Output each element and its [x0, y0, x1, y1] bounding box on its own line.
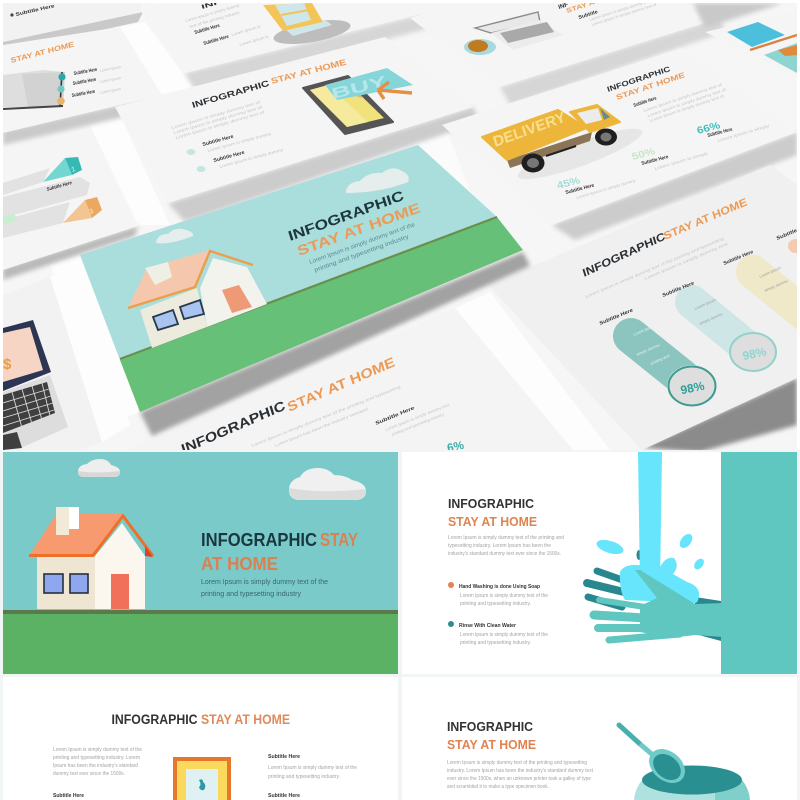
- front hand: [594, 570, 723, 640]
- water stream: [638, 452, 662, 585]
- stat: 66%: 66%: [696, 120, 722, 137]
- step bar 1: [3, 168, 50, 195]
- right text block: Subtitle Here: [268, 754, 300, 760]
- subtitle text: printing and typesetting industry: [314, 234, 410, 274]
- pill 2: 98%: [741, 344, 768, 363]
- slide: buy: [115, 37, 480, 222]
- foam: [620, 558, 699, 603]
- right text block: [268, 754, 357, 799]
- text lines: Lorem Ipsum is simply dummy text of: [175, 109, 266, 140]
- heading: STAY AT HOME: [448, 515, 537, 529]
- pill 2: simply dummy: [699, 312, 723, 326]
- back hand: [587, 550, 721, 641]
- slide: steps: [3, 157, 139, 282]
- ground: [120, 217, 523, 412]
- heading: INF: [558, 2, 569, 11]
- pill 4 fragment: [776, 228, 800, 253]
- text lines: [171, 99, 266, 140]
- text block: industry's standard dummy text ever since the 1500s.: [448, 551, 561, 557]
- step 3 accent: [3, 214, 18, 225]
- slide: top right with monitor: [693, 3, 797, 78]
- panel: perspective slide collage: [3, 0, 800, 457]
- icon: bowl and spoon: [619, 725, 750, 800]
- subtitle block: printing and typesetting industry: [391, 411, 444, 437]
- heading: [607, 66, 685, 100]
- slide: top laptop: [410, 0, 725, 105]
- pill 1: simply dummy: [636, 343, 660, 357]
- stat: 50%: Lorem Ipsum is simply: [654, 150, 709, 171]
- cloud: large: [289, 468, 366, 500]
- slide: percentage pills: [582, 165, 797, 450]
- heading: STAY AT HOME: [201, 712, 290, 727]
- heading: INFOGRAPHIC: [606, 64, 672, 94]
- heading: INFOGRAPHIC: [112, 712, 198, 727]
- text lines: Lorem Ipsum is simply dummy text of: [649, 93, 725, 123]
- text lines: Lorem Ipsum is simply dummy text of: [647, 87, 727, 118]
- text lines: Lorem Ipsum is simply dummy text of: [173, 104, 264, 135]
- stat: 66%: [697, 122, 769, 142]
- right text block: Subtitle Here: [268, 793, 300, 799]
- stat: 50%: 50%: [631, 146, 657, 163]
- icon: framed door: [263, 3, 350, 44]
- heading: STAY AT HOME: [295, 199, 422, 259]
- pill 1: 98%: [679, 379, 706, 397]
- left text block: printing and typesetting industry. Lorem: [53, 755, 140, 761]
- bullet: soap: printing and typesetting industry.: [460, 601, 531, 607]
- text lines: [185, 3, 269, 47]
- left text block: Ipsum has been the industry's standard: [53, 763, 138, 769]
- icon: hand washing under water: [587, 452, 797, 674]
- stat: 50%: Subtitle Here: [641, 154, 669, 167]
- text lines: Lorem Ipsum is simply dummy text: [644, 241, 729, 281]
- heading: INFOGRAPHIC: [191, 78, 270, 110]
- left text block: dummy text ever since the 1500s.: [53, 771, 125, 777]
- heading: [191, 57, 348, 110]
- pill 2: [662, 280, 776, 371]
- left text block: Lorem Ipsum is simply dummy text of the: [53, 747, 142, 753]
- pill 1: Subtitle Here: [599, 307, 634, 327]
- step bar 2: [3, 177, 90, 218]
- icon: phone with buy banner: BUY: [330, 73, 388, 103]
- panel: frame slide: [3, 677, 398, 800]
- heading: [558, 3, 595, 12]
- pill 1: Lorem Ipsum: [633, 324, 655, 337]
- text block: ever since the 1500s, when an unknown printer took a galley of type: [447, 776, 591, 782]
- bullet 1: [186, 131, 272, 155]
- icon: delivery truck: [481, 104, 642, 179]
- bullet: water: Lorem Ipsum is simply dummy text of the: [460, 632, 548, 638]
- right text block: Lorem Ipsum is simply dummy text of the: [268, 765, 357, 771]
- icon: step 1 prism: [43, 157, 82, 182]
- pill 3: Lorem Ipsum: [759, 266, 781, 279]
- heading: INFOGRAPHIC: [447, 720, 533, 734]
- pill 3: Subtitle Here: [723, 249, 754, 267]
- pill 3: [723, 249, 800, 320]
- bullet: soap: Hand Washing is done Using Soap: [459, 584, 540, 590]
- heading: INFOGRAPHIC: [581, 231, 667, 280]
- icon: step 3 prism: 3: [89, 208, 94, 216]
- slide: main house hero: [80, 145, 530, 436]
- heading: STAY AT HOME: [285, 354, 397, 415]
- right text block: printing and typesetting industry.: [268, 774, 340, 780]
- stat: 66%: Lorem Ipsum is simply: [717, 123, 770, 143]
- slide: top left fragment: Subtitle Here: [15, 3, 56, 18]
- text lines: Subtitle Here: [73, 67, 98, 77]
- heading: [112, 712, 290, 727]
- text lines: Lorem Ipsum is simply dummy: [185, 3, 240, 23]
- text lines: [633, 82, 727, 123]
- text lines: Lorem Ipsum: [99, 86, 122, 95]
- heading: [448, 497, 537, 529]
- text lines: Lorem Ipsum is simply dummy text of the printing and typesetting: [585, 236, 724, 299]
- subtitle text: printing and typesetting industry: [201, 591, 301, 598]
- slide: delivery: [442, 48, 797, 240]
- subtitle text: Lorem Ipsum is simply dummy text of the: [309, 222, 417, 266]
- text lines: Lorem Ipsum is simply dummy text of the printing and typesetting: [251, 384, 401, 448]
- heading: [201, 529, 359, 574]
- panel: hand washing slide: [402, 452, 797, 674]
- heading: INFOGRAPHIC: [201, 529, 317, 550]
- heading: [581, 196, 749, 280]
- teal sleeve: [721, 452, 797, 674]
- step 2 label: Subtitle Here: [46, 180, 72, 193]
- heading: STAY A: [565, 0, 596, 15]
- text lines: Lorem Ipsum is simply dummy text of: [171, 99, 262, 130]
- stat: 66%: Subtitle Here: [707, 127, 734, 139]
- bullet 2: Subtitle Here: [213, 150, 246, 164]
- bullet: water: Rinse With Clean Water: [459, 623, 516, 629]
- text lines: Lorem Ipsum: [99, 75, 122, 84]
- sky: [3, 452, 398, 610]
- text lines: Lorem Ipsum is simply dummy text of: [591, 2, 658, 27]
- heading: INFOGRAPHIC: [179, 398, 287, 457]
- pill 1: [599, 307, 717, 407]
- heading: STAY AT HOME: [662, 196, 749, 243]
- text lines: [585, 236, 729, 299]
- text block: typesetting industry. Lorem Ipsum has been the: [448, 543, 551, 549]
- subtitle block: [375, 402, 450, 437]
- pill 1: printing and: [650, 354, 670, 366]
- icon: laptop: [3, 320, 68, 450]
- text block: Lorem Ipsum is simply dummy text of the printing and: [448, 535, 564, 541]
- bullet: water: [448, 621, 548, 646]
- bullet 2: Lorem Ipsum is simply dummy: [219, 147, 284, 169]
- stat fragment: 6%: [446, 439, 466, 455]
- text lines: [251, 384, 401, 448]
- subtitle block: Subtitle Here: [375, 405, 416, 427]
- subtitle text: [201, 579, 328, 598]
- bullet: water: printing and typesetting industry.: [460, 640, 531, 646]
- pill 3: simply dummy: [764, 279, 788, 293]
- bullet 1: Lorem Ipsum is simply dummy: [207, 131, 272, 153]
- bullet: soap: Lorem Ipsum is simply dummy text of the: [460, 593, 548, 599]
- heading: INF: [201, 0, 222, 11]
- icon: step 1 prism: 1: [71, 166, 76, 174]
- text block: [447, 760, 594, 790]
- slide: top left fragment: [3, 5, 142, 45]
- heading: STAY: [320, 529, 359, 550]
- drops: [595, 532, 706, 571]
- heading: STAY AT HOME: [447, 738, 536, 752]
- panel: house slide: [3, 452, 398, 674]
- bullet: soap: [448, 582, 548, 607]
- icon: picture frame: [173, 757, 231, 800]
- bullet 2: [196, 147, 284, 172]
- subtitle block: Lorem Ipsum is simply dummy text: [385, 402, 450, 432]
- icon: book: [3, 70, 66, 109]
- icon: delivery truck: DELIVERY: [491, 109, 568, 151]
- text lines: Lorem Ipsum is: [231, 24, 261, 37]
- text block: industry. Lorem Ipsum has been the industry's standard dummy text: [447, 768, 594, 774]
- heading: STAY AT HOME: [10, 40, 75, 65]
- ground line: [3, 610, 398, 614]
- text block: Lorem Ipsum is simply dummy text of the printing and typesetting: [447, 760, 587, 766]
- stat: 45%: Subtitle Here: [565, 183, 595, 196]
- text lines: Subtitle Here: [194, 23, 221, 36]
- step bar 3: [3, 202, 70, 238]
- text lines: Lorem Ipsum has been the industry standard: [274, 406, 368, 448]
- subtitle text: Lorem Ipsum is simply dummy text of the: [201, 579, 328, 586]
- text lines: Subtitle Here: [72, 77, 97, 87]
- cloud: small: [78, 459, 120, 477]
- left text block: Subtitle Here: [53, 793, 84, 799]
- heading: INFOGRAPHIC: [448, 497, 534, 511]
- heading: [179, 354, 397, 457]
- slide: top centre with frame: [142, 3, 426, 87]
- icon: step 3 prism: [63, 197, 102, 223]
- text lines: Lorem Ipsum is simply dummy text of: [643, 82, 723, 113]
- bright strips beside slides: [50, 22, 610, 450]
- icon: laptop: [475, 12, 563, 50]
- stat: 45%: 45%: [556, 175, 582, 192]
- heading: INFOGRAPHIC: [286, 187, 406, 244]
- icon: coffee cup: [464, 39, 496, 55]
- text lines: Lorem Ipsum: [99, 64, 122, 73]
- text lines: [72, 66, 121, 97]
- pill 2: Subtitle Here: [662, 280, 695, 299]
- bullet 1: Subtitle Here: [202, 134, 235, 148]
- icon: phone with buy banner: [303, 68, 413, 134]
- grass: [3, 614, 398, 674]
- pill 4 fragment: Subtitle: [776, 228, 798, 242]
- text block: and scrambled it to make a type specimen book.: [447, 784, 549, 790]
- stat: 45%: Lorem Ipsum is simply dummy: [576, 178, 636, 200]
- heading: [286, 187, 422, 259]
- slide: laptop left: [3, 277, 102, 450]
- stat: 50%: [632, 148, 708, 170]
- text lines: text of the printing industry: [189, 10, 240, 29]
- icon: house: [128, 250, 267, 348]
- clouds: [156, 168, 409, 243]
- heading: STAY AT HOME: [615, 70, 686, 102]
- heading: AT HOME: [201, 553, 278, 574]
- text lines: Lorem Ipsum is: [239, 34, 269, 47]
- icon: house: [29, 507, 153, 609]
- text lines: Subtitle Here: [71, 89, 96, 99]
- text lines: Subtitle Here: [203, 34, 230, 47]
- icon: monitor and desk: [727, 22, 797, 73]
- slide: bottom centre: [127, 308, 573, 457]
- pill 2: Lorem Ipsum: [694, 298, 716, 311]
- text lines: Subtitle Here: [633, 95, 658, 109]
- text lines: Subtitle: [578, 9, 599, 21]
- heading: STAY AT HOME: [270, 57, 348, 86]
- text block: [448, 535, 564, 557]
- left text block: [53, 747, 142, 799]
- panel: bowl slide: [402, 677, 797, 800]
- slide: book: [3, 29, 146, 146]
- stat: 45%: [558, 177, 636, 199]
- heading: [447, 720, 536, 752]
- icon: laptop: $: [3, 356, 12, 373]
